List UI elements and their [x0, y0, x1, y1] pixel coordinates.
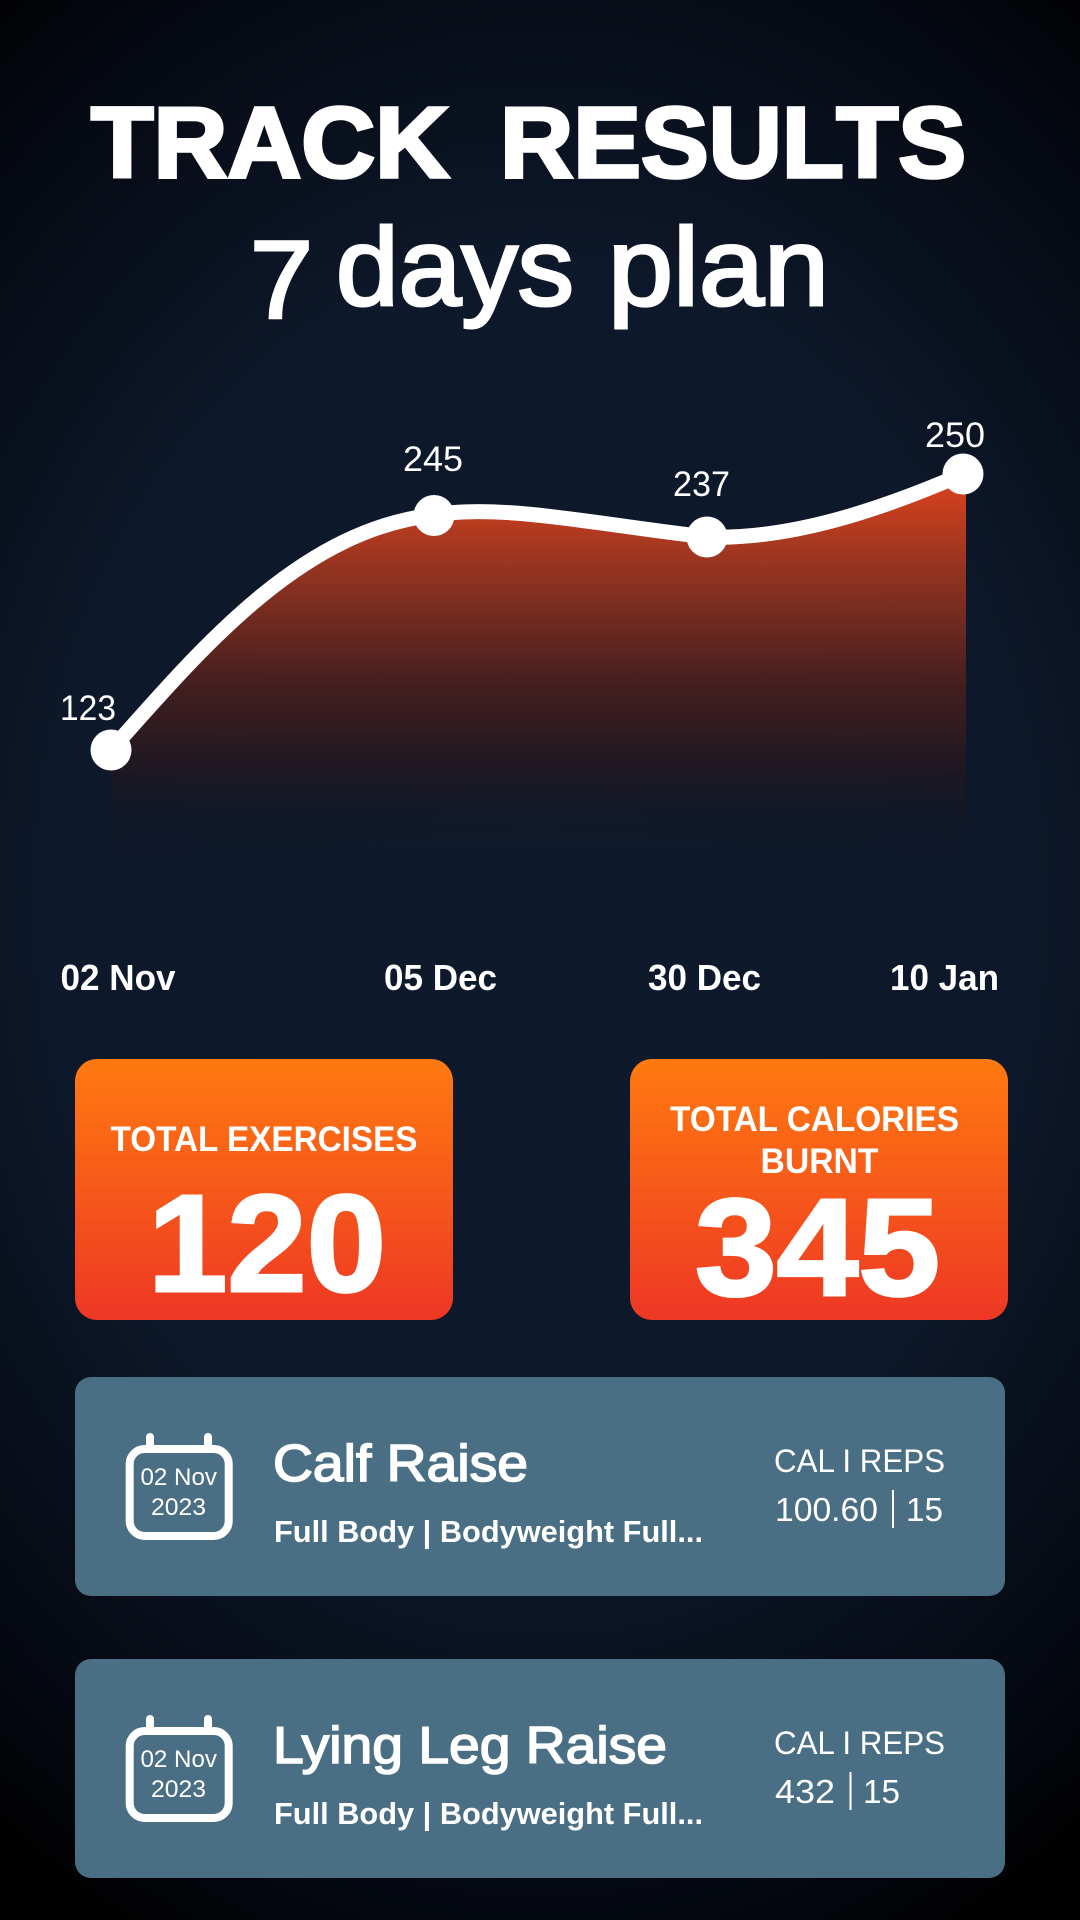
icon: calendar: 02 Nov — [140, 1746, 218, 1773]
exercise name: Lying Leg Raise — [273, 1717, 667, 1775]
icon: calendar — [130, 1437, 229, 1536]
icon: calendar: 2023 — [151, 1776, 206, 1803]
stats heading: CAL I REPS — [774, 1443, 945, 1479]
stats values: 15 — [906, 1491, 943, 1528]
data point 1 — [90, 730, 132, 770]
label — [670, 1100, 959, 1181]
stats heading: CAL I REPS — [774, 1725, 945, 1761]
date label 10 Jan: 10 Jan — [890, 957, 999, 998]
date label 05 Dec: 05 Dec — [384, 957, 497, 998]
line chart — [60, 416, 999, 998]
data point 2 — [414, 495, 454, 536]
stats values: 15 — [863, 1773, 900, 1810]
value label 250: 250 — [925, 416, 985, 455]
date label 02 Nov: 02 Nov — [60, 957, 176, 998]
exercise name: Calf Raise — [273, 1435, 528, 1493]
heading: track results: RESULTS — [500, 87, 966, 199]
stats values: 100.60 — [775, 1491, 878, 1528]
value label 123: 123 — [60, 689, 116, 728]
label: TOTAL EXERCISES — [110, 1120, 418, 1159]
data point 4 — [942, 454, 984, 494]
trend curve — [111, 474, 963, 750]
icon: calendar: 02 Nov — [140, 1464, 218, 1491]
value: 345 — [695, 1171, 940, 1325]
label line 1: TOTAL CALORIES — [670, 1100, 959, 1139]
heading: track results: TRACK — [91, 87, 449, 199]
data point 3 — [686, 516, 728, 558]
heading: 7 days plan — [250, 206, 829, 342]
panel: lying leg raise — [75, 1659, 1005, 1878]
heading: track results — [91, 87, 966, 199]
value label 237: 237 — [673, 465, 730, 504]
stats values — [775, 1772, 900, 1810]
card background — [75, 1059, 453, 1320]
value: 120 — [148, 1167, 386, 1321]
exercise details: Full Body | Bodyweight Full... — [274, 1796, 703, 1831]
heading: 7 days plan: plan — [608, 206, 829, 329]
panel: total calories burnt — [630, 1059, 1008, 1325]
icon: calendar — [130, 1719, 229, 1818]
exercise details: Full Body | Bodyweight Full... — [274, 1514, 703, 1549]
heading: 7 days plan: days — [336, 206, 574, 329]
panel: total exercises — [75, 1059, 453, 1321]
icon: calendar: 2023 — [151, 1494, 206, 1521]
panel: calf raise — [75, 1377, 1005, 1596]
stats values — [775, 1490, 943, 1528]
card background — [630, 1059, 1008, 1320]
card background — [75, 1377, 1005, 1596]
label line 2: BURNT — [760, 1142, 878, 1181]
chart area fill — [111, 474, 966, 860]
stats values: 432 — [775, 1773, 835, 1810]
card background — [75, 1659, 1005, 1878]
date label 30 Dec: 30 Dec — [648, 957, 761, 998]
value label 245: 245 — [403, 440, 463, 479]
title — [91, 87, 966, 342]
heading: 7 days plan: 7 — [250, 219, 313, 342]
